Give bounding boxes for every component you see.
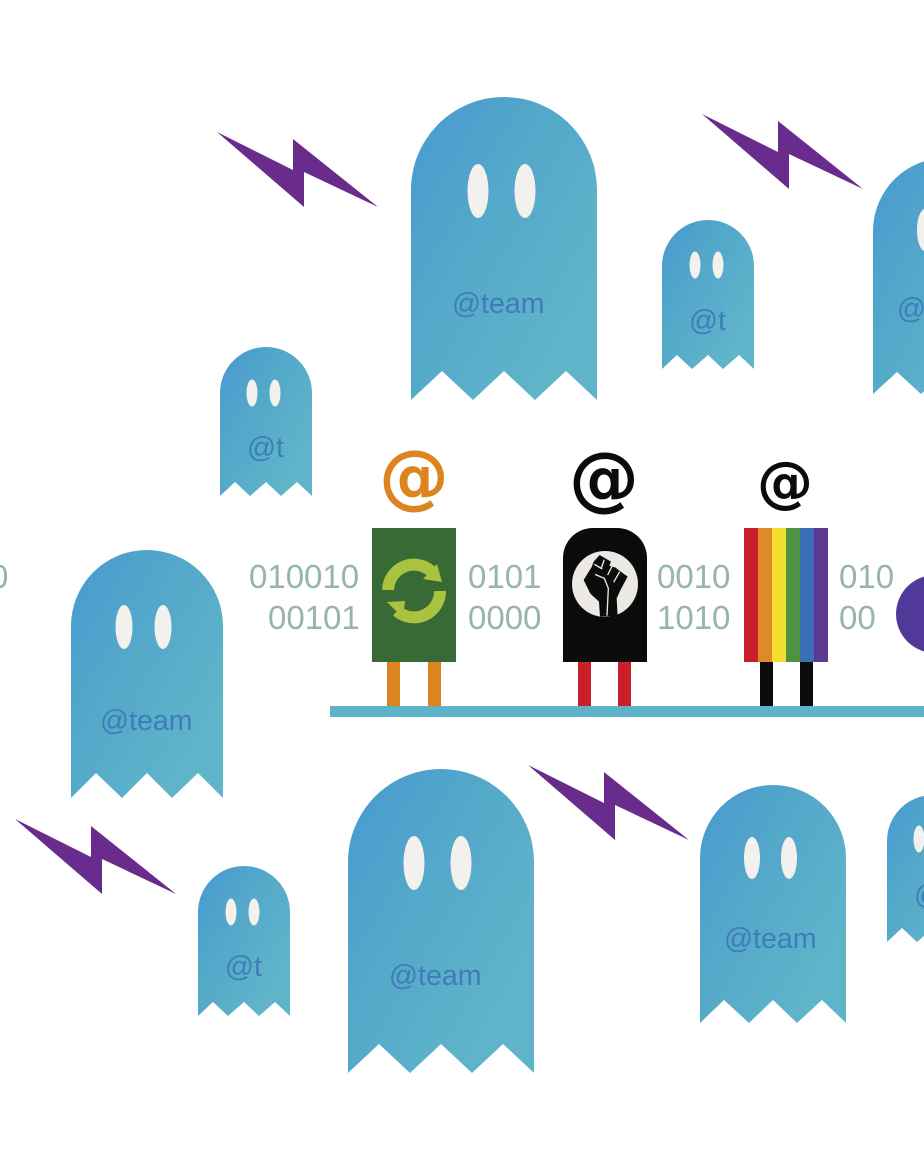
ghost: medium left: @team: [100, 705, 193, 737]
binary text: between black and rainbow figures: 0010: [657, 558, 730, 595]
binary text: left of green figure: [249, 558, 360, 636]
ghost: medium cropped at right edge: [873, 158, 924, 394]
figure: green recycle account: [372, 435, 456, 706]
binary text: left of green figure: 010010: [249, 558, 359, 595]
ghost: medium bottom right: @team: [724, 923, 817, 955]
lightning bolt: top left: [217, 132, 378, 207]
icon: recycle arrows: [387, 564, 442, 618]
shelf: [330, 706, 924, 717]
ghost: small left of figures: @t: [247, 432, 284, 464]
ghost: small top right: [662, 220, 754, 369]
binary text: right of rainbow figure: 00: [839, 599, 876, 636]
at sign: black: @: [569, 437, 639, 519]
binary text: right of rainbow figure: 010: [839, 558, 894, 595]
ghost: large top centre: @team: [452, 288, 545, 320]
ghost: medium bottom right: [700, 785, 846, 1023]
icon: raised fist: [584, 555, 628, 617]
ghost: small cropped at right edge: [887, 795, 924, 942]
at sign: black small: @: [757, 450, 813, 515]
ghost: medium left: [71, 550, 223, 798]
lightning bolt: lower left: [15, 819, 176, 894]
purple circle figure head: [896, 575, 924, 653]
ghost: large bottom centre: @team: [389, 960, 482, 992]
figure: rainbow account: [744, 450, 828, 706]
binary text: between black and rainbow figures: [657, 558, 730, 636]
at sign: orange: @: [379, 435, 449, 517]
ghost: small left of figures: [220, 347, 312, 496]
ghost: small lower left: @t: [225, 951, 262, 983]
lightning bolt: centre: [528, 765, 689, 840]
binary text: between black and rainbow figures: 1010: [657, 599, 730, 636]
binary text: left of green figure: 00101: [268, 599, 360, 636]
binary text: between green and black figures: 0101: [468, 558, 541, 595]
binary text: between green and black figures: [468, 558, 541, 636]
ghost: small top right: @t: [689, 305, 726, 337]
ghost: large bottom centre: [348, 769, 534, 1073]
ghost: small lower left: [198, 866, 290, 1016]
binary text: right of rainbow figure: [839, 558, 894, 636]
figure: black raised fist account: [563, 437, 647, 706]
lightning bolt: top right: [702, 114, 863, 189]
ghost: large top centre: [411, 97, 597, 400]
binary text: between green and black figures: 0000: [468, 599, 541, 636]
